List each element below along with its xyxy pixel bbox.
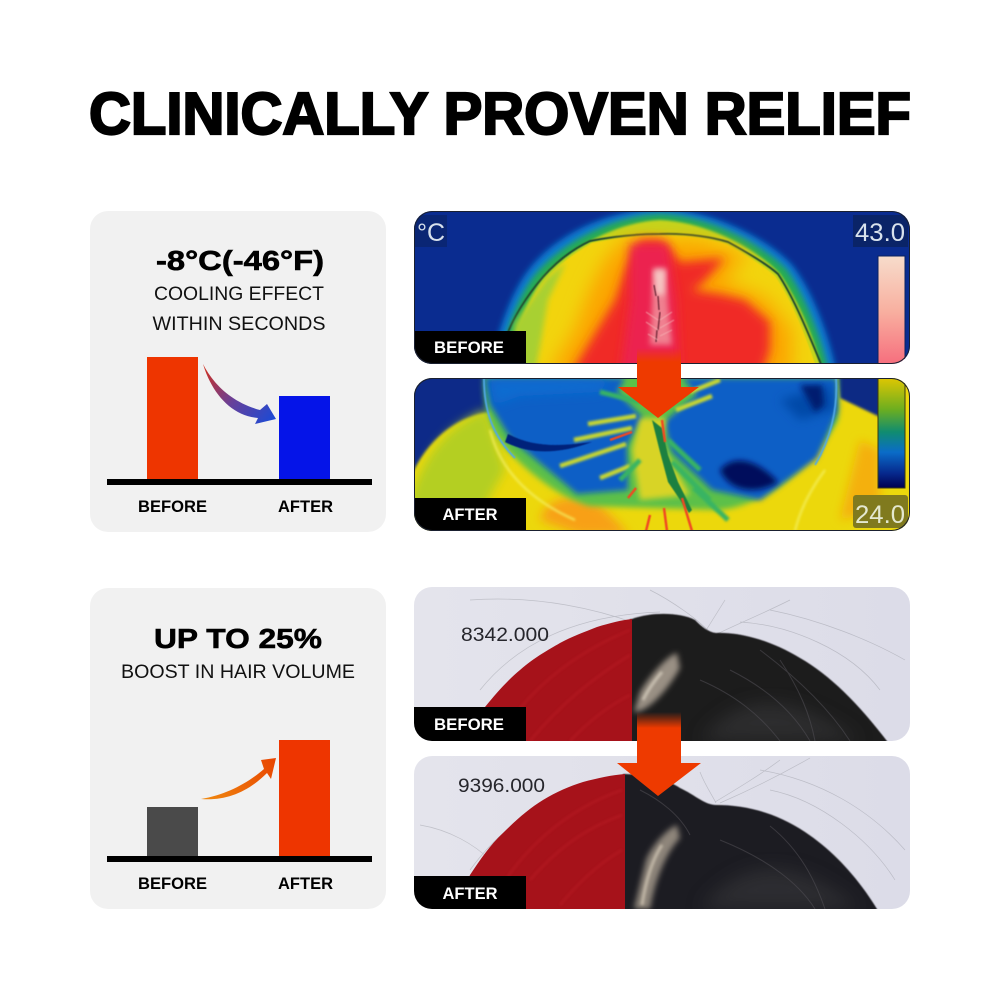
label: thermal after: AFTER <box>442 505 498 524</box>
red highlighted hair area <box>455 774 625 909</box>
label: hair after: AFTER <box>442 884 498 903</box>
arrow: volume rising <box>201 758 276 799</box>
scale: cold colour bar <box>878 376 905 488</box>
scalp parting <box>634 653 680 712</box>
volume headline: UP TO 25% <box>154 623 322 654</box>
scale: degrees celsius label: °C <box>417 219 445 247</box>
volume subtitle: BOOST IN HAIR VOLUME <box>121 661 355 683</box>
thermal image: before <box>414 209 910 375</box>
cooling headline: -8°C(-46°F) <box>156 245 324 276</box>
scalp parting streak <box>652 420 692 513</box>
hair image: after <box>414 756 910 914</box>
panel: cooling effect <box>90 211 386 532</box>
scale: maximum temperature: 43.0 <box>855 219 905 247</box>
arrow: temperature falling <box>203 364 276 424</box>
measurement value: before: 8342.000 <box>461 625 549 646</box>
thermal image: after <box>410 374 910 535</box>
bar label: before: BEFORE <box>138 874 207 893</box>
bar chart: temperature before and after <box>107 357 372 516</box>
cooling subtitle line 2: WITHIN SECONDS <box>152 313 326 335</box>
panel: hair volume <box>90 588 386 909</box>
bar chart: hair volume before and after <box>107 740 372 893</box>
label: thermal after <box>414 498 526 531</box>
hair image: before <box>414 587 910 745</box>
head cooled zone <box>484 374 838 510</box>
head outline <box>504 234 821 364</box>
cooling subtitle line 1: COOLING EFFECT <box>154 283 324 305</box>
label: thermal before: BEFORE <box>434 338 504 357</box>
label: thermal before <box>414 331 526 364</box>
bar label: after: AFTER <box>278 874 333 893</box>
arrow: thermal before to after <box>618 348 699 418</box>
scalp parting <box>634 825 680 909</box>
arrow: hair before to after <box>617 712 701 796</box>
measurement value: after: 9396.000 <box>458 776 545 797</box>
red highlighted hair area <box>485 619 632 741</box>
label: hair before: BEFORE <box>434 715 504 734</box>
bar label: before: BEFORE <box>138 497 207 516</box>
scale: minimum temperature: 24.0 <box>855 501 905 529</box>
title: CLINICALLY PROVEN RELIEF <box>89 81 911 147</box>
scale: hot colour bar <box>878 256 905 366</box>
label: hair before <box>414 707 526 741</box>
label: hair after <box>414 876 526 909</box>
bar label: after: AFTER <box>278 497 333 516</box>
